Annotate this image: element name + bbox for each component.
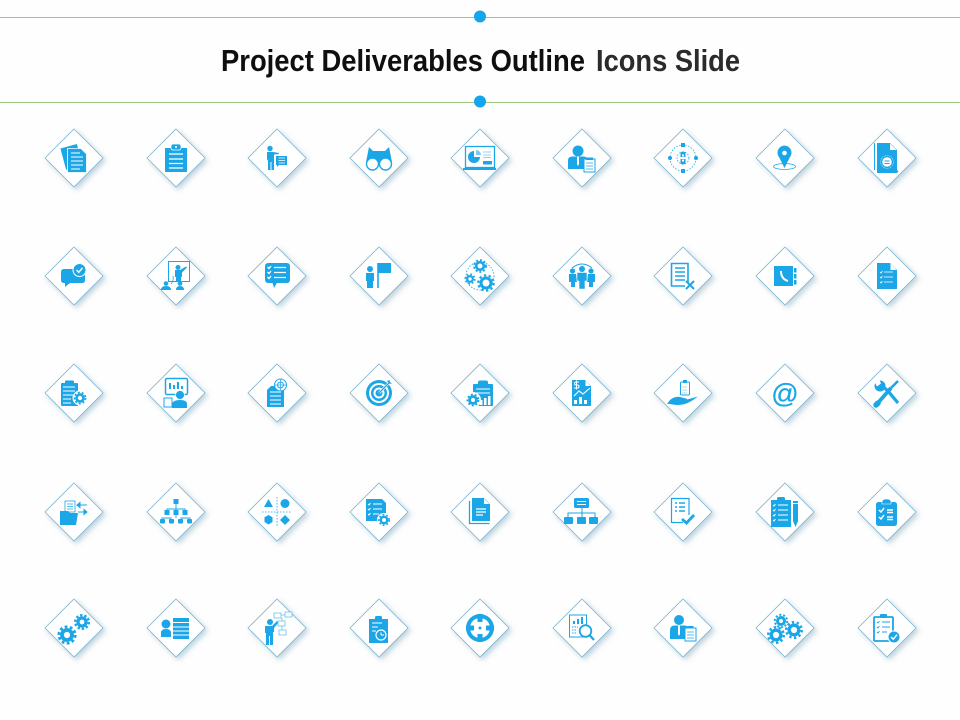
header top rule with dot [0, 10, 960, 22]
tile: crosshair [451, 599, 509, 657]
tile: org chart [553, 483, 611, 541]
icon: chat checklist [265, 263, 290, 288]
icon: document rejected [672, 264, 694, 289]
tile: three gears [756, 599, 814, 657]
icon: shapes [262, 497, 292, 527]
tile: document rejected [654, 247, 712, 305]
tile: document stack [451, 483, 509, 541]
icon: financial report [572, 380, 591, 406]
tile: shapes [248, 483, 306, 541]
tile: clipboard approved [858, 599, 916, 657]
tile: phone book [756, 247, 814, 305]
tile: list with check [654, 483, 712, 541]
icon: presenter with speech bubble [267, 146, 287, 170]
icon: crosshair [466, 614, 494, 642]
tile: clipboard [147, 129, 205, 187]
icon: org tree [160, 499, 192, 524]
tile: clipboard gear chart [451, 364, 509, 422]
tile: checklist with gear [350, 483, 408, 541]
icon: team [569, 264, 595, 289]
icon: clipboard with clock [369, 616, 388, 643]
icon: binoculars [366, 147, 392, 170]
icon: clipboard [165, 144, 187, 172]
tile: clipboard with gear [45, 364, 103, 422]
tile: laptop with pie chart [451, 129, 509, 187]
icon: documents [60, 144, 86, 172]
icon: person with flag [366, 263, 391, 288]
icon: person with list [161, 618, 189, 639]
tile: financial report [553, 364, 611, 422]
tile: wrench and screwdriver [858, 364, 916, 422]
icon: document with magnifier [874, 143, 898, 173]
tile: orbit [654, 129, 712, 187]
tile: businessman with report [654, 599, 712, 657]
icon: presentation board analyst [164, 378, 188, 408]
tile: chat with check [45, 247, 103, 305]
tile: clipboard with clock [350, 599, 408, 657]
tile: binoculars [350, 129, 408, 187]
tile: target [350, 364, 408, 422]
tile: clipboard with checks [858, 483, 916, 541]
tile: at sign [756, 364, 814, 422]
icon: clipboard with checks [876, 499, 897, 526]
tile: person with flowchart [248, 599, 306, 657]
icon: target [366, 380, 392, 406]
icon: document stack [470, 498, 490, 524]
tile: person with flag [350, 247, 408, 305]
icon: businessman with clipboard [568, 146, 595, 172]
icon: process gears [465, 260, 494, 291]
tile: clipboard and pencil [756, 483, 814, 541]
icon: folder transfer [60, 501, 87, 525]
tile: person with list [147, 599, 205, 657]
tile: process gears [451, 247, 509, 305]
tile: two gears [45, 599, 103, 657]
icon: chat with check [61, 264, 86, 287]
header bottom rule with dot [0, 96, 960, 108]
tile: training presentation [147, 247, 205, 305]
icon: at sign: @ [771, 378, 799, 408]
tile: document with target [248, 364, 306, 422]
icon: list with check [672, 498, 694, 523]
icon: phone book [774, 266, 796, 286]
icon: businessman with report [670, 615, 696, 641]
tile: documents [45, 129, 103, 187]
tile: businessman with clipboard [553, 129, 611, 187]
tile: location pin [756, 129, 814, 187]
icon: three gears [768, 615, 802, 643]
icon: location pin [774, 146, 796, 170]
icon: org chart [564, 498, 598, 524]
tile: chart search [553, 599, 611, 657]
tile: hand holding clipboard [654, 364, 712, 422]
icon: document with target [267, 379, 286, 407]
title: Project Deliverables Outline [221, 43, 585, 78]
tile: chat checklist [248, 247, 306, 305]
icon: two gears [59, 615, 89, 643]
tile: presenter with speech bubble [248, 129, 306, 187]
icon: person with flowchart [265, 612, 292, 645]
icon: training presentation [161, 262, 190, 290]
tile: org tree [147, 483, 205, 541]
title: Icons Slide [596, 43, 740, 78]
icon: laptop with pie chart [463, 146, 496, 170]
tile: document checklist [858, 247, 916, 305]
icon: clipboard gear chart [465, 380, 493, 408]
tile: document with magnifier [858, 129, 916, 187]
icon: clipboard approved [874, 614, 900, 643]
tile: folder transfer [45, 483, 103, 541]
tile: team [553, 247, 611, 305]
icon: document checklist [877, 263, 897, 289]
icon: orbit [668, 143, 698, 173]
icon: clipboard and pencil [771, 497, 798, 527]
icon: chart search [570, 615, 594, 640]
icon: checklist with gear [366, 499, 391, 527]
tile: presentation board analyst [147, 364, 205, 422]
icon: clipboard with gear [61, 380, 88, 406]
icon: hand holding clipboard [667, 380, 698, 405]
icon: wrench and screwdriver [874, 379, 898, 405]
